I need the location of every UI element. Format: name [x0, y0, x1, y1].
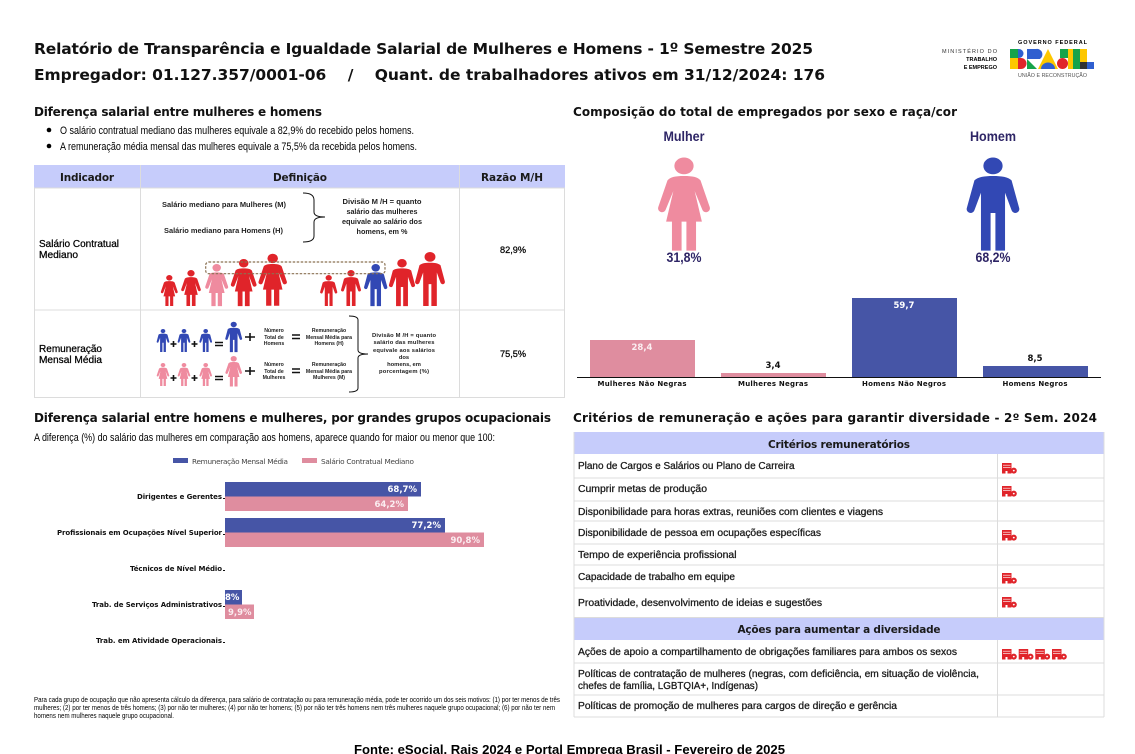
table header [60, 172, 543, 184]
footnote: Para cada grupo de ocupação que não apresenta cálculo da diferença, para salário de contratação ou para remuneração média, pode ter ocorrido um dos seis motivos: (1) por ter menos de três [34, 695, 560, 704]
bar chart: composição: Mulheres Negras [738, 380, 808, 388]
bracket and division text: dos [399, 355, 409, 361]
ministry label: E EMPREGO [964, 65, 998, 71]
heading: diferença salarial: Diferença salarial entre mulheres e homens [34, 105, 322, 119]
equation: homens: Mensal Média para [306, 335, 352, 341]
reconstruction label: UNIÃO E RECONSTRUÇÃO [1018, 72, 1087, 79]
equation: mulheres [157, 356, 352, 386]
bar chart: grupos ocupacionais: 64,2% [374, 500, 404, 510]
value: 75,5%: 75,5% [500, 349, 527, 360]
action rows [578, 647, 979, 712]
criteria rows: Cumprir metas de produção [578, 484, 707, 495]
header: critérios remuneratórios: Critérios remuneratórios [768, 439, 910, 451]
criteria rows [578, 461, 883, 609]
figure: mulher 31,8%: 31,8% [666, 249, 702, 265]
figure: homem 68,2%: 68,2% [976, 249, 1011, 265]
government label: GOVERNO FEDERAL [1018, 40, 1088, 46]
definition: mediana [162, 193, 422, 242]
equation: mulheres: Mulheres (M) [313, 375, 345, 381]
equation: mulheres: Remuneração [312, 362, 346, 368]
heading: grandes grupos ocupacionais: Diferença salarial entre homens e mulheres, por grandes grupos ocupacionais [34, 411, 551, 425]
bar chart: composição: 3,4 [765, 361, 781, 371]
ministry label [942, 48, 998, 71]
row label: remuneração mensal média: Remuneração [39, 344, 102, 355]
action rows: Ações de apoio a compartilhamento de obrigações familiares para ambos os sexos [578, 647, 957, 658]
table header: Razão M/H [481, 172, 543, 184]
legend: Salário Contratual Mediano [321, 457, 415, 466]
bar chart: grupos ocupacionais: 77,2% [412, 521, 441, 531]
action rows: Políticas de promoção de mulheres para cargos de direção e gerência [578, 701, 897, 712]
bar chart: grupos ocupacionais: 8% [225, 593, 240, 603]
icons: fila de mulheres [161, 254, 287, 306]
equation: homens: Total de [264, 335, 284, 341]
bar chart: grupos ocupacionais [57, 482, 484, 645]
bar chart: grupos ocupacionais: Dirigentes e Gerentes [137, 493, 222, 501]
ministry label: MINISTÉRIO DO [942, 48, 998, 55]
criteria rows: Capacidade de trabalho em equipe [578, 572, 735, 583]
equation: homens: Homens [264, 341, 284, 347]
bar chart: composição: Homens Negros [1002, 380, 1068, 388]
bracket and division text [349, 316, 436, 392]
criteria rows: Plano de Cargos e Salários ou Plano de Carreira [578, 461, 795, 472]
table header: Definição [273, 172, 327, 184]
equation: mulheres: Número [264, 362, 284, 368]
footnote: mulheres; (2) por ter menos de três homens; (3) por não ter mulheres; (4) por não ter homens; (5) por não ter três homens nem três mulheres naquele grupo ocupacional; (6) por não ter nem [34, 703, 555, 712]
heading: critérios: Critérios de remuneração e ações para garantir diversidade - 2º Sem. 2024 [573, 411, 1097, 425]
logo: ministério e governo federal [942, 40, 1094, 79]
bracket and division text: Divisão M /H = quanto [372, 333, 436, 339]
heading: composição: Composição do total de empregados por sexo e raça/cor [573, 105, 957, 119]
equation: mulheres: Total de [264, 369, 284, 375]
bar chart: grupos ocupacionais: 68,7% [388, 485, 417, 495]
definition: mediana: salário das mulheres [346, 209, 418, 216]
definition: mediana: equivale ao salário dos [342, 219, 422, 226]
bracket and division text: homens, em [387, 362, 421, 368]
brasil colour mosaic [1010, 49, 1094, 69]
definition: mediana: Salário mediano para Mulheres (M) [162, 202, 286, 209]
figure: homem 68,2%: Homem [970, 128, 1016, 144]
row label: remuneração mensal média: Mensal Média [39, 355, 102, 366]
row label: salário contratual mediano: Mediano [39, 250, 78, 261]
footnote [34, 695, 560, 720]
value: 82,9%: 82,9% [500, 245, 527, 256]
title [34, 40, 825, 84]
subtitle: A diferença (%) do salário das mulheres em comparação aos homens, aparece quando for maior ou menor que 100: [34, 432, 495, 444]
title: Empregador: 01.127.357/0001-06 / Quant. de trabalhadores ativos em 31/12/2024: 176 [34, 66, 825, 84]
definition: mediana: homens, em % [356, 229, 408, 236]
bar chart: grupos ocupacionais: Trab. de Serviços Administrativos [92, 601, 222, 609]
bar chart: composição: 59,7 [894, 301, 915, 311]
figure: mulher 31,8%: Mulher [664, 128, 705, 144]
definition: mediana: Salário mediano para Homens (H) [164, 228, 283, 235]
criteria rows: Proatividade, desenvolvimento de ideias e sugestões [578, 598, 822, 609]
definition: mediana: Divisão M /H = quanto [342, 199, 422, 206]
criteria rows: Disponibilidade para horas extras, reuniões com clientes e viagens [578, 507, 883, 518]
bar chart: grupos ocupacionais: Técnicos de Nível Médio [130, 565, 222, 573]
equation: homens [157, 322, 352, 352]
criteria rows: Disponibilidade de pessoa em ocupações específicas [578, 528, 821, 539]
row label: salário contratual mediano [39, 239, 119, 261]
equation: mulheres: Mensal Média para [306, 369, 352, 375]
action rows: Políticas de contratação de mulheres (negras, com deficiência, em situação de violência, [578, 669, 979, 680]
panel: tabela de indicadores [34, 165, 565, 398]
figure: mulher 31,8% [658, 128, 710, 265]
icons: fila de homens [320, 252, 445, 306]
equation: homens: Número [264, 328, 284, 334]
equation: homens: Remuneração [312, 328, 346, 334]
bar chart: composição: Mulheres Não Negras [598, 380, 686, 388]
bar chart: grupos ocupacionais: 9,9% [228, 608, 252, 618]
row label: remuneração mensal média [39, 344, 102, 366]
figure: homem 68,2% [967, 128, 1019, 265]
bar chart: grupos ocupacionais: 90,8% [450, 536, 480, 546]
bullet list: A remuneração média mensal das mulheres equivale a 75,5% da recebida pelos homens. [60, 141, 417, 153]
bar chart: composição [577, 298, 1101, 388]
bracket and division text: porcentagem (%) [379, 369, 429, 375]
bullet list: O salário contratual mediano das mulheres equivale a 82,9% do recebido pelos homens. [60, 125, 414, 137]
equation: mulheres: Mulheres [263, 375, 285, 381]
panel: tabela de critérios [574, 432, 1104, 717]
bar chart: composição: 8,5 [1027, 354, 1043, 364]
criteria rows: Tempo de experiência profissional [578, 550, 737, 561]
footnote: homens nem mulheres naquele grupo ocupacional. [34, 711, 174, 720]
legend: Remuneração Mensal Média [192, 457, 288, 466]
action rows: chefes de família, LGBTQIA+, Indígenas) [578, 681, 758, 692]
bar chart: grupos ocupacionais: Trab. em Atividade Operacionais [96, 637, 222, 645]
bar chart: grupos ocupacionais: Profissionais em Ocupações Nível Superior [57, 529, 223, 537]
bullet list [47, 125, 417, 153]
ministry label: TRABALHO [966, 57, 998, 63]
bar chart: composição: 28,4 [632, 343, 653, 353]
row label: salário contratual mediano: Salário Contratual [39, 239, 119, 250]
bracket and division text: salário das mulheres [374, 340, 434, 346]
table header: Indicador [60, 172, 115, 184]
equation: homens: Homens (H) [314, 341, 344, 347]
icons: empresas por ação [1002, 649, 1067, 660]
header: ações para diversidade: Ações para aumentar a diversidade [738, 624, 940, 636]
icons: empresas por critério [1002, 463, 1017, 608]
median highlight [206, 262, 385, 274]
legend [173, 457, 415, 466]
bracket and division text: equivale aos salários [373, 348, 435, 354]
bar chart: composição: Homens Não Negros [862, 380, 946, 388]
title: Relatório de Transparência e Igualdade Salarial de Mulheres e Homens - 1º Semestre 2025 [34, 40, 813, 58]
